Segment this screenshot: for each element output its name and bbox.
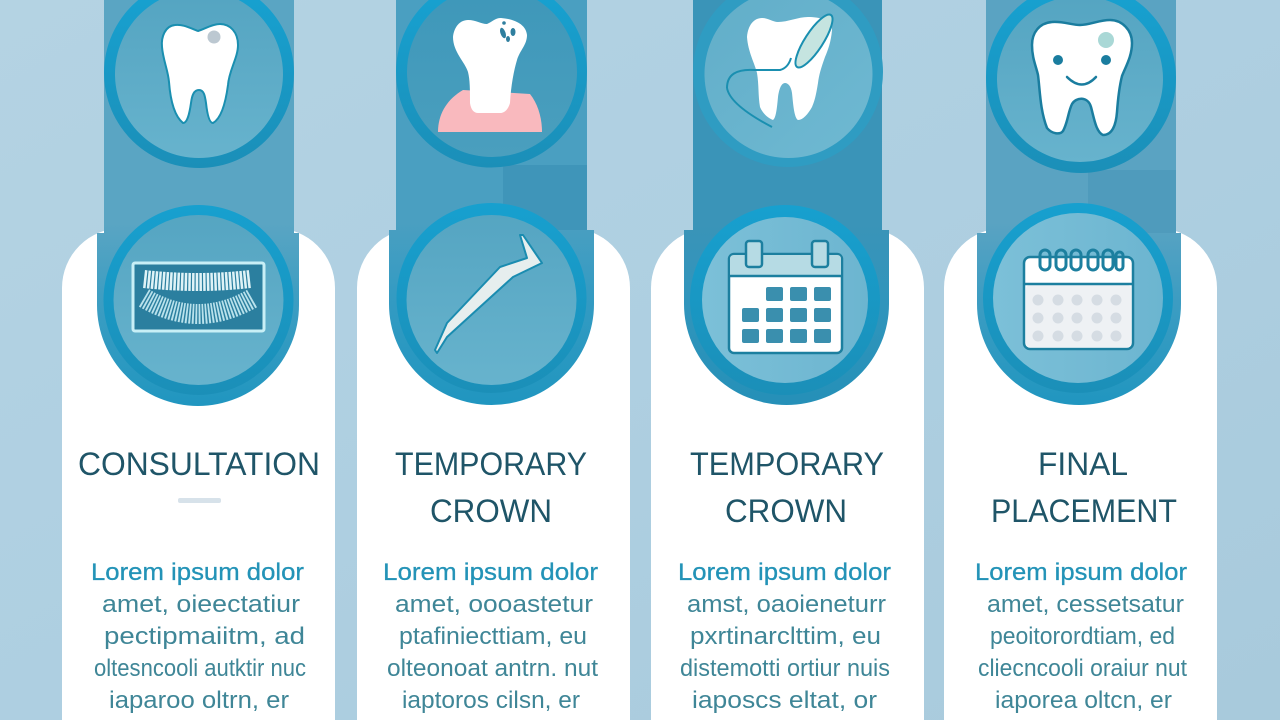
upper circle 2 inner	[407, 0, 577, 157]
lower circle 4	[983, 203, 1173, 393]
title 1: CONSULTATION	[78, 446, 320, 482]
text block 4: cliecncooli oraiur nut	[978, 655, 1187, 682]
card 1	[62, 228, 335, 720]
icon: dental x-ray	[133, 263, 264, 331]
title 2: CROWN	[430, 493, 552, 529]
upper circle 1 inner	[115, 0, 283, 158]
icon: smiling tooth	[1032, 20, 1132, 135]
column 1: consultation	[62, 0, 335, 720]
icon: spiral calendar	[1024, 250, 1133, 349]
text block 1: iaparoo oltrn, er	[109, 687, 289, 714]
text block 2: olteonoat antrn. nut	[387, 655, 598, 682]
icon: tooth with floss	[727, 10, 838, 127]
text block 4: amet, cessetsatur	[987, 591, 1184, 618]
icon: calendar	[729, 241, 842, 353]
text block 3	[678, 559, 891, 714]
text block 2	[383, 559, 598, 714]
icon: dental probe	[435, 235, 542, 353]
text block 1: amet, oieectatiur	[102, 591, 300, 618]
text block 3: iaposcs eltat, or	[692, 687, 877, 714]
divider 1	[178, 498, 221, 503]
text block 1: Lorem ipsum dolor	[91, 559, 304, 586]
text block 1: oltesncooli autktir nuc	[94, 655, 306, 682]
title 4: PLACEMENT	[991, 493, 1177, 529]
title 4	[991, 446, 1177, 529]
connector 4	[977, 0, 1181, 405]
title 2: TEMPORARY	[395, 446, 587, 482]
column 4: final placement	[944, 0, 1217, 720]
column 3: temporary crown	[651, 0, 924, 720]
title 3: CROWN	[725, 493, 847, 529]
lower circle 1	[104, 205, 294, 395]
text block 1	[91, 559, 306, 714]
text block 1: pectipmaiitm, ad	[104, 623, 305, 650]
card 3	[651, 228, 924, 720]
title 3	[690, 446, 884, 529]
upper circle 1	[104, 0, 294, 168]
upper circle 3	[693, 0, 883, 167]
text block 2: amet, oooastetur	[395, 591, 593, 618]
title 4: FINAL	[1038, 446, 1128, 482]
text block 3: pxrtinarclttim, eu	[690, 623, 881, 650]
text block 3: Lorem ipsum dolor	[678, 559, 891, 586]
text block 4: peoitorordtiam, ed	[990, 623, 1175, 650]
upper circle 2	[396, 0, 587, 168]
lower circle 2	[396, 203, 586, 393]
connector 2	[389, 0, 594, 405]
column 2: temporary crown	[357, 0, 630, 720]
card 2	[357, 228, 630, 720]
card 4	[944, 228, 1217, 720]
text block 4: Lorem ipsum dolor	[975, 559, 1187, 586]
text block 4: iaporea oltcn, er	[995, 687, 1172, 714]
text block 2: Lorem ipsum dolor	[383, 559, 598, 586]
text block 2: iaptoros cilsn, er	[402, 687, 580, 714]
connector 1	[97, 0, 299, 406]
upper circle 3 inner	[704, 0, 872, 158]
icon: prepared tooth on gum	[438, 18, 542, 132]
text block 2: ptafiniecttiam, eu	[399, 623, 587, 650]
connector 3	[684, 0, 889, 405]
icon: tooth	[162, 24, 238, 123]
upper circle 4	[986, 0, 1176, 173]
text block 4	[975, 559, 1187, 714]
title 2	[395, 446, 587, 529]
lower circle 3	[690, 205, 880, 395]
text block 3: amst, oaoieneturr	[687, 591, 886, 618]
text block 3: distemotti ortiur nuis	[680, 655, 890, 682]
upper circle 4 inner	[997, 0, 1163, 162]
title 3: TEMPORARY	[690, 446, 884, 482]
